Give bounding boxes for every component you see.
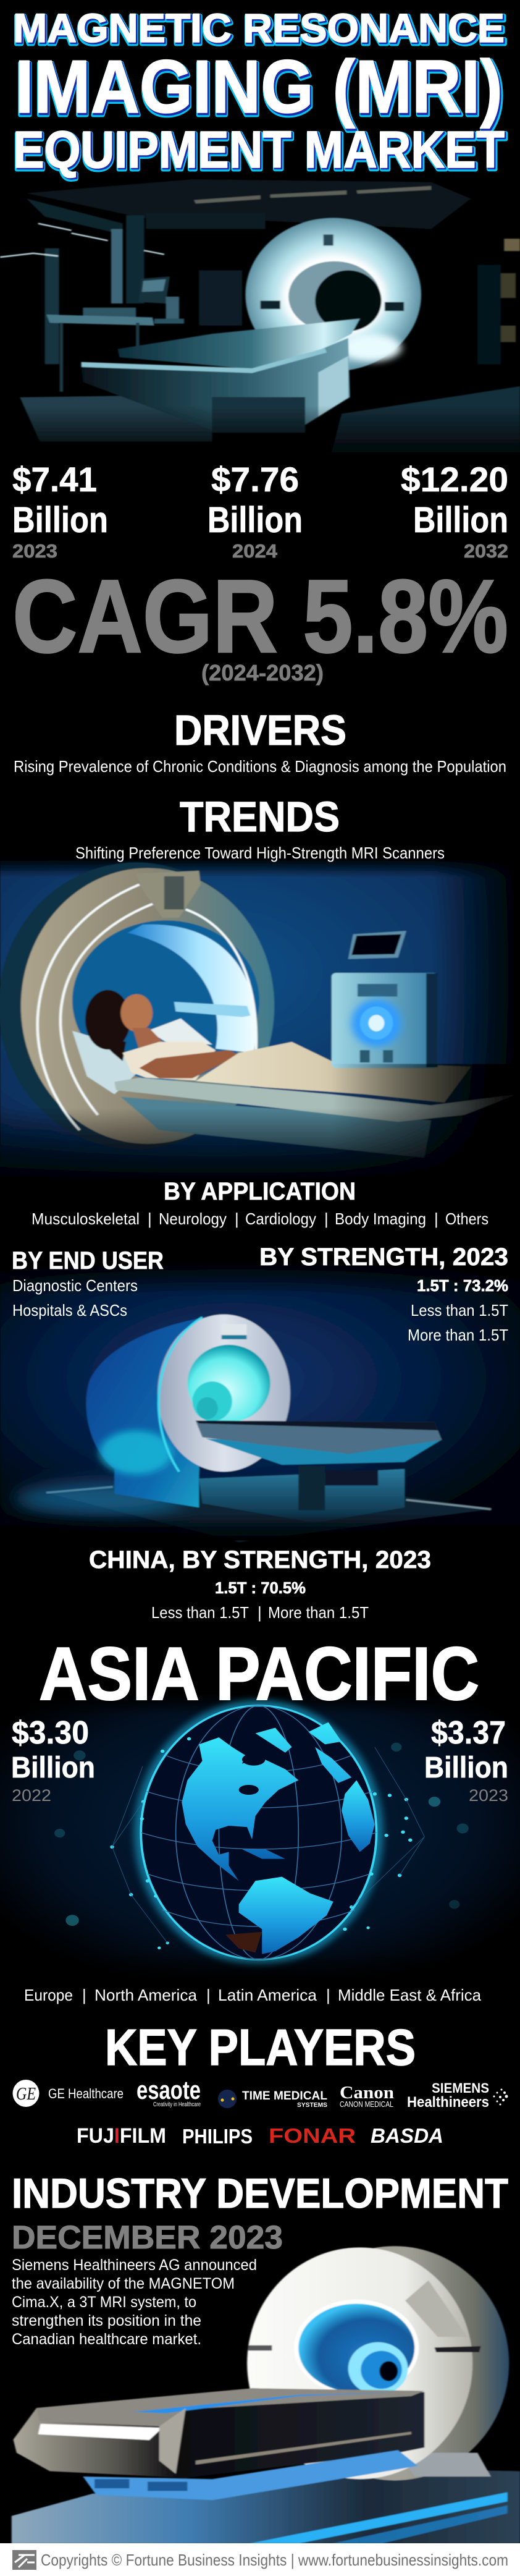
logo: esaote: Creativity in Healthcare [153, 2101, 201, 2108]
2023 value [12, 460, 108, 562]
logo: Fonar: FONAR [269, 2124, 356, 2147]
logo: Time Medical: TIME MEDICAL [242, 2090, 327, 2103]
development description: Cima.X, a 3T MRI system, to [12, 2294, 196, 2311]
by end user: Hospitals & ASCs [12, 1301, 127, 1320]
asia pacific 2022 value [11, 1715, 95, 1805]
logo: Fujifilm: FUJIFILM [77, 2124, 166, 2148]
2032 value: 2032 [464, 540, 508, 562]
logo: GE Healthcare: GE Healthcare [48, 2086, 124, 2101]
2023 value: $7.41 [12, 460, 97, 499]
by application: Body Imaging [335, 1210, 426, 1228]
logo: Time Medical [218, 2090, 327, 2109]
footer logo [12, 2550, 36, 2570]
magnet [247, 2246, 509, 2480]
logo: Canon: CANON MEDICAL [340, 2099, 393, 2109]
other regions: | [326, 1986, 330, 2004]
logo: Canon [340, 2083, 394, 2109]
other regions [24, 1986, 482, 2004]
network dots [54, 1737, 469, 1949]
table [13, 2388, 424, 2500]
asia pacific 2023 value: 2023 [469, 1786, 508, 1805]
patient [85, 990, 471, 1103]
asia pacific 2023 value: Billion [424, 1752, 508, 1784]
other regions: | [206, 1986, 211, 2004]
key players heading: KEY PLAYERS [105, 2019, 416, 2076]
bed [72, 1019, 518, 1158]
footer [0, 2543, 520, 2576]
by application: Neurology [159, 1210, 227, 1228]
image: MRI machine white [12, 2246, 520, 2544]
by end user [12, 1247, 164, 1320]
other regions: Middle East & Africa [338, 1986, 482, 2004]
bore [294, 2300, 419, 2396]
china by strength: Less than 1.5T [151, 1603, 249, 1622]
logo: Siemens Healthineers [407, 2080, 508, 2111]
by end user: BY END USER [12, 1247, 164, 1274]
2023 value: Billion [12, 500, 108, 540]
platform [12, 2468, 520, 2544]
by application: BY APPLICATION [164, 1178, 356, 1205]
asia pacific 2023 value [424, 1715, 508, 1805]
scanner ring [245, 218, 421, 371]
china by strength: More than 1.5T [268, 1603, 369, 1622]
asia pacific 2022 value: Billion [11, 1752, 95, 1784]
floor platform [44, 1486, 492, 1542]
logo: Siemens Healthineers: Healthineers [407, 2094, 489, 2111]
asia pacific 2022 value: $3.30 [12, 1715, 89, 1751]
2032 value [401, 460, 508, 562]
other regions: Latin America [218, 1986, 317, 2004]
china by strength [89, 1546, 431, 1622]
other regions: | [82, 1986, 86, 2004]
logo: esaote: esaote [136, 2075, 201, 2104]
by end user: Diagnostic Centers [12, 1276, 138, 1295]
by application: | [148, 1210, 152, 1228]
trends [75, 793, 445, 862]
logo: GE Healthcare: GE [16, 2085, 36, 2104]
by application: | [235, 1210, 239, 1228]
image: globe [0, 1693, 520, 1981]
image: patient in MRI scanner [0, 858, 520, 1185]
by strength: BY STRENGTH, 2023 [259, 1244, 508, 1271]
2032 value: Billion [413, 500, 508, 540]
drivers [14, 706, 506, 776]
by application: Musculoskeletal [31, 1210, 140, 1228]
logo: Basda: BASDA [371, 2124, 443, 2147]
development description: Siemens Healthineers AG announced [12, 2256, 257, 2274]
by application [31, 1178, 489, 1228]
china by strength: 1.5T : 70.5% [215, 1578, 306, 1597]
2032 value: $12.20 [401, 460, 508, 499]
asia pacific 2023 value: $3.37 [431, 1715, 506, 1751]
scanner ring [0, 863, 274, 1150]
floor [20, 386, 520, 452]
by strength: 1.5T : 73.2% [417, 1276, 508, 1295]
control console [332, 931, 438, 1068]
CAGR: (2024-2032) [201, 660, 324, 685]
2024 value: Billion [208, 500, 303, 540]
2023 value: 2023 [12, 540, 57, 562]
continents [182, 1722, 375, 1954]
image: MRI machine with cyan bore [0, 1261, 520, 1542]
by strength: More than 1.5T [408, 1326, 508, 1344]
by strength [259, 1244, 508, 1344]
hero image: MRI room [0, 179, 520, 460]
other regions: North America [94, 1986, 198, 2004]
bore [187, 1345, 270, 1422]
by strength: Less than 1.5T [411, 1301, 508, 1320]
logo: Time Medical: SYSTEMS [297, 2102, 327, 2109]
title: MAGNETIC RESONANCE [14, 7, 506, 53]
2024 value: 2024 [232, 540, 278, 562]
drivers: DRIVERS [174, 706, 346, 754]
logo: Philips: PHILIPS [182, 2125, 253, 2148]
industry development: DECEMBER 2023 [12, 2219, 283, 2256]
development description: Canadian healthcare market. [12, 2331, 201, 2348]
china by strength: | [258, 1603, 262, 1622]
network lines [112, 1747, 424, 1943]
development description: strengthen its position in the [12, 2312, 201, 2329]
by application: Others [445, 1210, 489, 1228]
trends: TRENDS [180, 793, 340, 841]
other regions: Europe [24, 1986, 73, 2004]
monitor and cart [46, 276, 184, 392]
by application: | [434, 1210, 438, 1228]
table [196, 1421, 442, 1523]
2024 value: $7.76 [211, 460, 299, 499]
market size figures [12, 460, 508, 562]
globe sphere [134, 1700, 383, 1965]
logos [12, 2075, 508, 2148]
asia pacific heading: ASIA PACIFIC [39, 1632, 479, 1716]
industry development [12, 2170, 508, 2348]
logo: Siemens Healthineers: SIEMENS [432, 2080, 489, 2096]
logo: Canon: Canon [340, 2083, 394, 2103]
patient table [82, 319, 360, 433]
title: MAGNETIC RESONANCE [14, 6, 506, 52]
by application: | [324, 1210, 329, 1228]
2024 value [208, 460, 303, 562]
logo: GE Healthcare [12, 2080, 124, 2107]
trends: Shifting Preference Toward High-Strength MRI Scanners [75, 844, 445, 862]
development description [12, 2256, 257, 2348]
title: MAGNETIC RESONANCE [13, 5, 505, 51]
magnet body [86, 1315, 290, 1507]
development description: the availability of the MAGNETOM [12, 2275, 235, 2292]
title [13, 5, 506, 180]
china by strength: CHINA, BY STRENGTH, 2023 [89, 1546, 431, 1574]
asia pacific 2022 value: 2022 [12, 1786, 51, 1805]
by application: Cardiology [245, 1210, 316, 1228]
